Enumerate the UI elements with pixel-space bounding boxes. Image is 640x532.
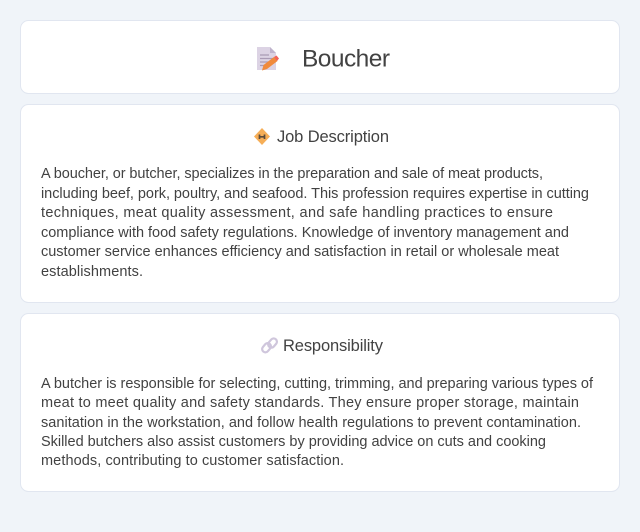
text block: job description: customer service enhances efficiency and satisfaction in retail or wholesale meat — [41, 244, 559, 260]
heading text: Job Description — [277, 128, 389, 146]
panel: job description — [20, 104, 620, 302]
text block: job description: establishments. — [41, 264, 143, 280]
text block: job description: compliance with food safety regulations. Knowledge of inventory management and — [41, 225, 569, 241]
heading: job description — [254, 128, 389, 146]
text block: job description: techniques, meat quality assessment, and safe handling practices to ensure — [41, 205, 553, 221]
text block: responsibility: Skilled butchers also assist customers by providing advice on cuts and cooking — [41, 434, 546, 450]
text block: responsibility: meat to meet quality and safety standards. They ensure proper storage, maintain — [41, 395, 579, 411]
panel: title — [20, 20, 620, 94]
icon: chain link — [261, 337, 278, 354]
icon: road sign — [254, 128, 270, 145]
title text: Boucher — [302, 46, 390, 72]
icon: document with pencil — [257, 47, 279, 70]
text block: job description: A boucher, or butcher, specializes in the preparation and sale of meat products, — [41, 166, 543, 182]
text block: job description: including beef, pork, poultry, and seafood. This profession requires expertise in cutting — [41, 186, 589, 202]
text block: responsibility: methods, contributing to customer satisfaction. — [41, 453, 344, 469]
heading text: Responsibility — [283, 337, 384, 355]
text block: responsibility: A butcher is responsible for selecting, cutting, trimming, and preparing various types of — [41, 376, 594, 392]
panel: responsibility — [20, 314, 620, 492]
text block: responsibility: sanitation in the workstation, and follow health regulations to prevent contamination. — [41, 415, 581, 431]
heading: responsibility — [261, 337, 384, 355]
